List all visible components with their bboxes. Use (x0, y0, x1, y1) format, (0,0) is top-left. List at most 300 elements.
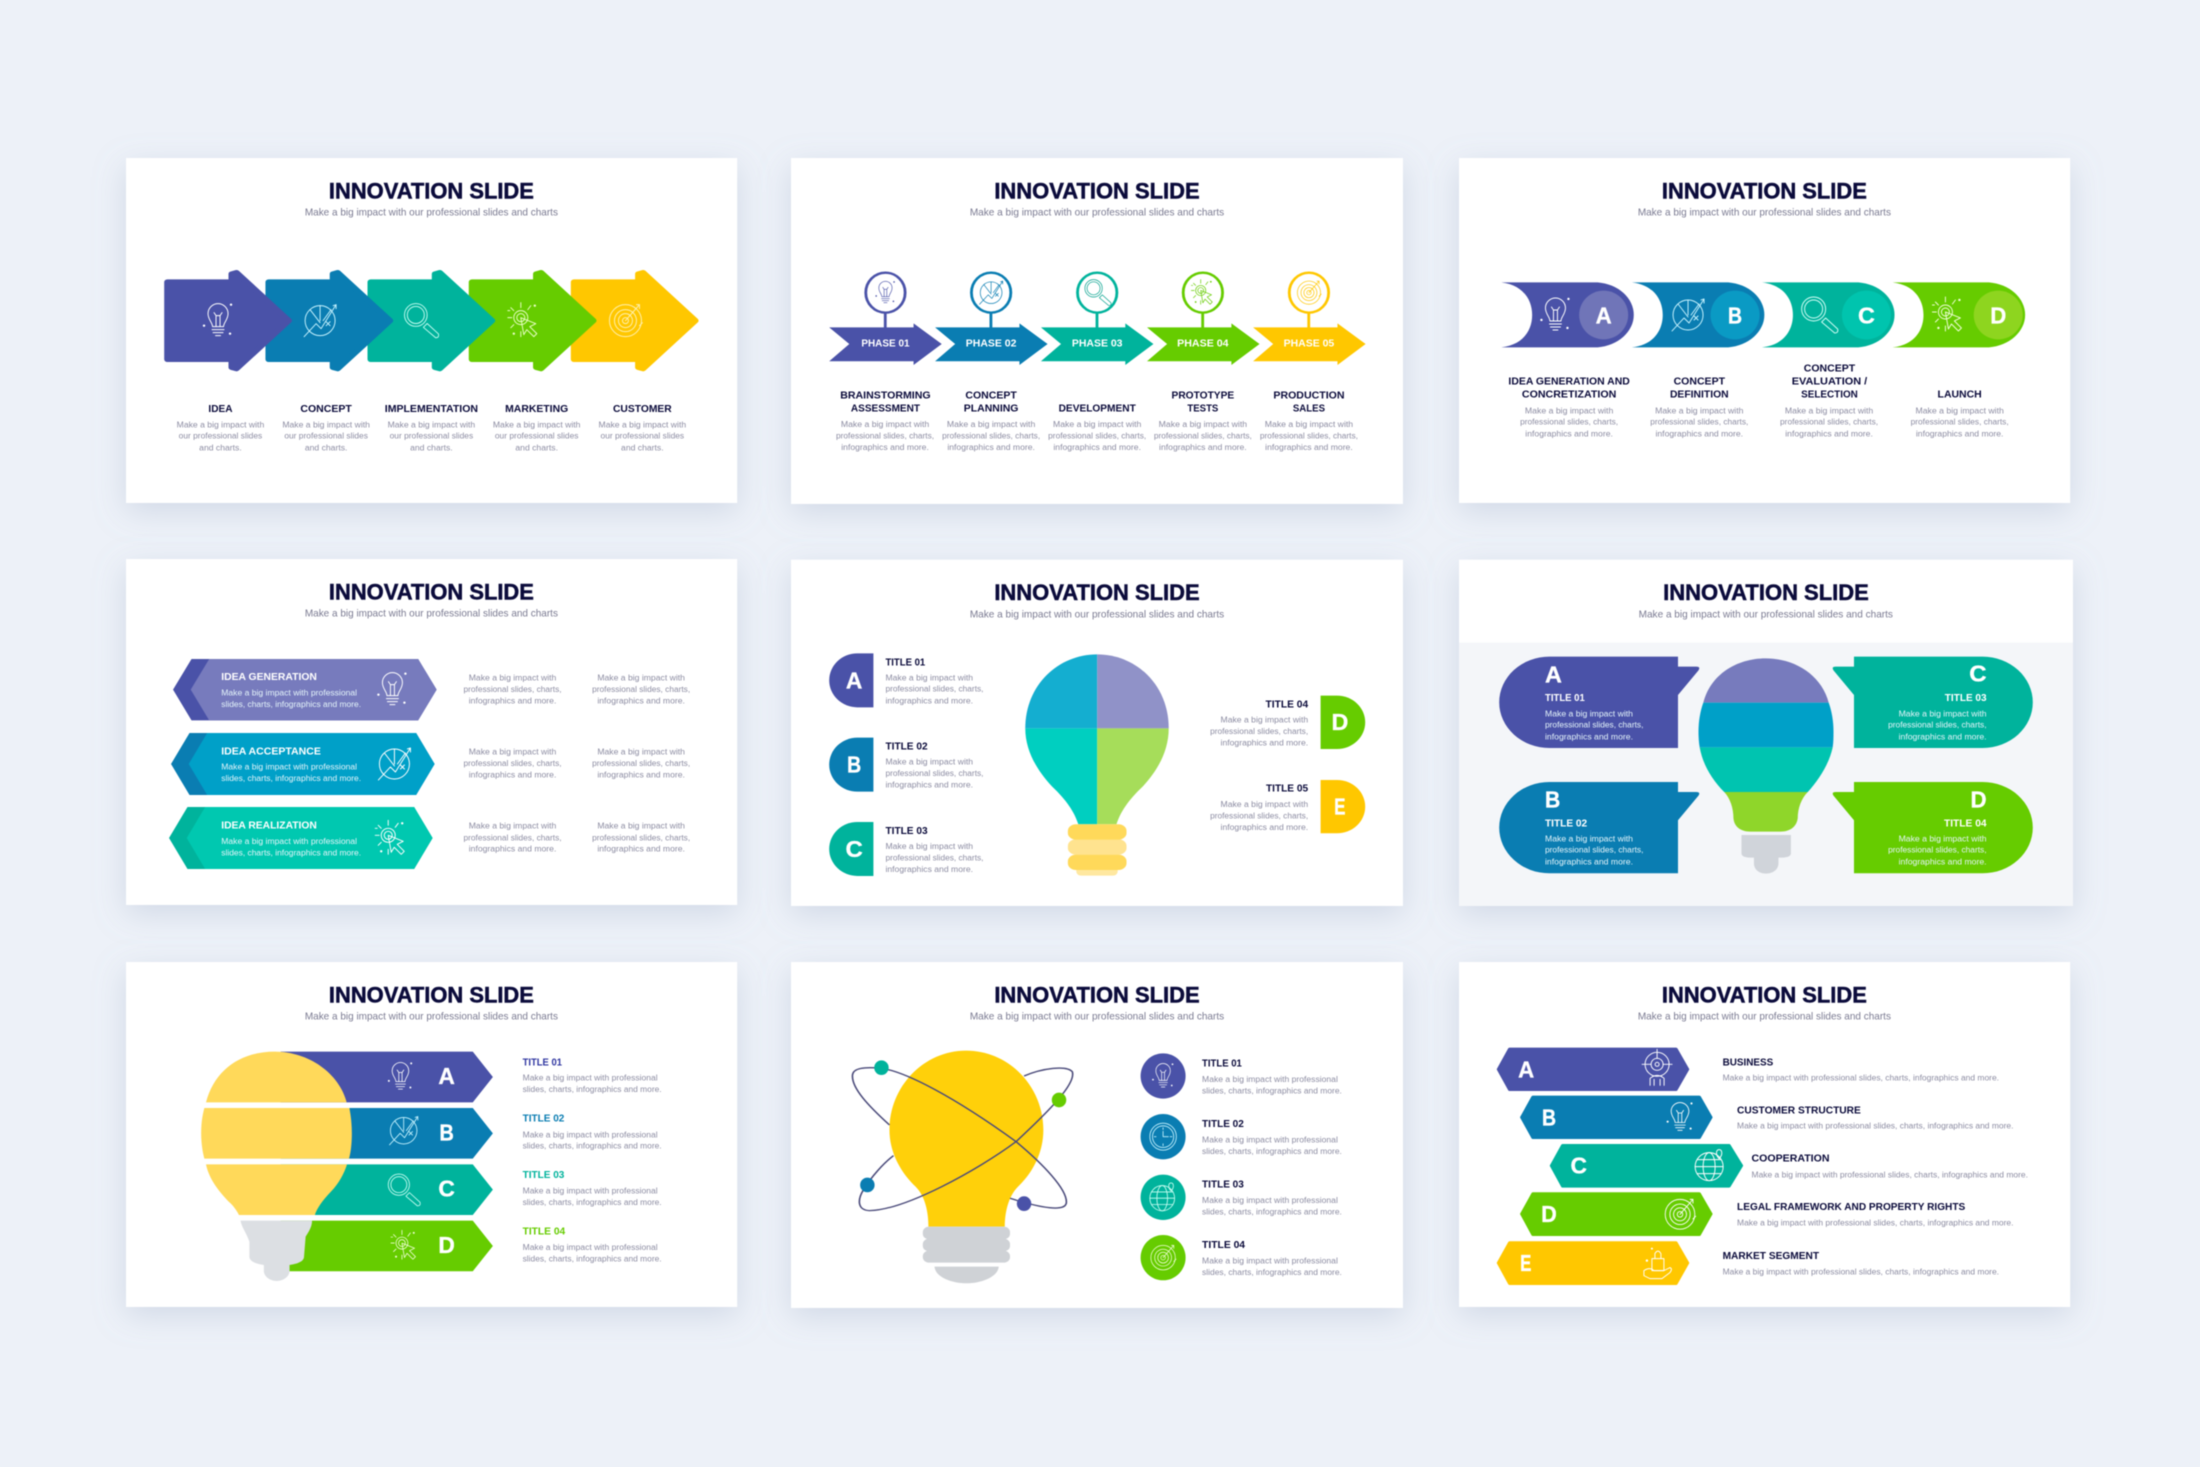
text: brainstorming (836, 391, 934, 452)
text: marketing: MARKETING (505, 404, 568, 415)
text: concept planning: professional slides, charts, (942, 431, 1040, 440)
panel: slide 4 hexagon banners (126, 559, 737, 905)
text: brainstorming: professional slides, charts, (836, 431, 934, 440)
slide card (1459, 158, 2070, 503)
text: prototype tests: TESTS (1187, 403, 1219, 414)
text: idea generation: professional slides, charts, (1520, 417, 1618, 426)
item B (829, 738, 983, 792)
text: row 2 descriptions (464, 747, 690, 779)
item E: Make a big impact with (1221, 800, 1308, 809)
arrow: marketing (472, 273, 593, 369)
item D: Make a big impact with (1221, 715, 1308, 724)
icon: pie (390, 1117, 418, 1145)
bar E: market segment: MARKET SEGMENT (1723, 1251, 1819, 1262)
text: development: DEVELOPMENT (1059, 403, 1136, 414)
list item 2 (1141, 1114, 1342, 1159)
item B: professional slides, charts, (885, 769, 983, 778)
text: brainstorming: ASSESSMENT (851, 403, 920, 414)
text: launch: infographics and more. (1916, 429, 2003, 438)
bar C: cooperation (1551, 1145, 2028, 1186)
list item 3: slides, charts, infographics and more. (1202, 1207, 1342, 1216)
arrow: phase 04: PHASE 04 (1177, 339, 1229, 349)
panel: slide 9 staggered hexagons (1459, 962, 2070, 1307)
text: title 04: slides, charts, infographics and more. (523, 1254, 662, 1263)
text: development: professional slides, charts, (1048, 431, 1146, 440)
bar B: customer structure (1522, 1097, 2014, 1138)
pill D: D (1990, 303, 2006, 329)
text: idea: our professional slides (179, 431, 263, 440)
text: marketing: and charts. (515, 443, 558, 452)
text: row 1 descriptions: professional slides, charts, (592, 685, 690, 694)
callout B: TITLE 02 (1545, 818, 1587, 829)
text: prototype tests (1154, 391, 1252, 452)
text: customer: and charts. (621, 443, 664, 452)
phase 3 marker (1078, 273, 1117, 328)
text: row 1 descriptions (464, 673, 690, 705)
text: row 1 descriptions: Make a big impact with (469, 673, 556, 682)
text: row 3 descriptions: infographics and more. (469, 844, 556, 853)
callout B: B (1545, 787, 1560, 813)
text: implementation: our professional slides (390, 431, 474, 440)
pill D (1893, 282, 2025, 347)
banner: idea generation (173, 659, 437, 720)
slide card (126, 962, 737, 1307)
text: concept: CONCEPT (300, 404, 352, 415)
pill C: C (1858, 303, 1875, 329)
text: implementation: and charts. (410, 443, 453, 452)
callout A: professional slides, charts, (1545, 720, 1643, 729)
text: production sales: infographics and more. (1265, 443, 1353, 452)
item C: professional slides, charts, (885, 853, 983, 862)
arrow: concept (269, 273, 390, 369)
item E: professional slides, charts, (1210, 811, 1308, 820)
panel: slide 8 atom bulb (791, 962, 1403, 1308)
banner: idea acceptance (171, 733, 435, 795)
text: title 01: slides, charts, infographics and more. (523, 1085, 662, 1094)
text: development: infographics and more. (1053, 443, 1141, 452)
callout B (1499, 782, 1699, 873)
list item 4: TITLE 04 (1202, 1240, 1246, 1251)
text: row 2 descriptions: infographics and more. (469, 770, 556, 779)
subheading: Make a big impact with our professional slides and charts (970, 1011, 1224, 1022)
callout A: Make a big impact with (1545, 709, 1633, 718)
text: implementation (385, 404, 478, 452)
text: concept planning: Make a big impact with (947, 420, 1035, 429)
list item 2: TITLE 02 (1202, 1119, 1244, 1130)
text: title 03: slides, charts, infographics and more. (523, 1198, 662, 1207)
subheading: Make a big impact with our professional slides and charts (970, 609, 1224, 620)
list item 1 (1141, 1053, 1342, 1099)
split yellow bulb (201, 1052, 352, 1281)
subheading: Make a big impact with our professional slides and charts (305, 207, 558, 218)
text: row 1 descriptions: Make a big impact with (597, 673, 685, 682)
text: concept evaluation: SELECTION (1801, 390, 1858, 400)
banner: idea acceptance: IDEA ACCEPTANCE (221, 746, 321, 757)
letter B: B (439, 1120, 454, 1146)
text: title 01: TITLE 01 (523, 1057, 563, 1068)
text: title 02: slides, charts, infographics and more. (523, 1141, 662, 1150)
text: title 01: Make a big impact with professional (523, 1073, 658, 1082)
text: implementation: IMPLEMENTATION (385, 404, 478, 415)
arrow: phase 02 (935, 323, 1048, 365)
subheading: Make a big impact with our professional slides and charts (1639, 609, 1893, 620)
text: prototype tests: Make a big impact with (1159, 420, 1247, 429)
text: row 3 descriptions: Make a big impact with (469, 821, 556, 830)
text: customer: CUSTOMER (613, 404, 672, 415)
text: concept evaluation: CONCEPT (1804, 364, 1855, 374)
callout C: professional slides, charts, (1888, 720, 1987, 729)
text: development (1048, 403, 1146, 452)
ribbon D (281, 1221, 493, 1271)
arrow: phase 05 (1253, 323, 1366, 365)
text: title 04 (523, 1226, 662, 1263)
text: concept planning: CONCEPT (965, 391, 1017, 401)
pill C (1762, 282, 1895, 347)
item D: infographics and more. (1221, 738, 1308, 747)
ribbon C (281, 1164, 493, 1215)
item C: C (845, 837, 863, 862)
item B: infographics and more. (885, 780, 973, 789)
text: launch: LAUNCH (1938, 390, 1982, 400)
yellow bulb (889, 1051, 1043, 1283)
callout D: Make a big impact with (1899, 834, 1987, 843)
banner: idea generation: slides, charts, infographics and more. (221, 700, 361, 709)
text: concept evaluation: EVALUATION / (1792, 377, 1868, 387)
subheading: Make a big impact with our professional slides and charts (305, 1011, 558, 1022)
callout A (1499, 657, 1699, 748)
text: idea: and charts. (199, 443, 242, 452)
subheading: Make a big impact with our professional slides and charts (1638, 207, 1891, 218)
list item 3: Make a big impact with professional (1202, 1196, 1338, 1205)
callout A: infographics and more. (1545, 732, 1633, 741)
orbits and planets (852, 1060, 1073, 1211)
text: concept definition (1650, 377, 1748, 438)
list item 4: Make a big impact with professional (1202, 1256, 1338, 1265)
callout B: professional slides, charts, (1545, 845, 1643, 854)
item E (1210, 780, 1365, 833)
panel: slide 6 callouts and striped bulb (1459, 560, 2073, 906)
text: title 03: Make a big impact with professional (523, 1186, 658, 1195)
text: idea generation: infographics and more. (1525, 429, 1613, 438)
text: launch (1911, 390, 2009, 438)
arrow: phase 01: PHASE 01 (861, 339, 910, 349)
slide card (791, 560, 1403, 906)
lower tinted band (1459, 643, 2073, 906)
item A: A (846, 668, 862, 694)
text: row 1 descriptions: professional slides, charts, (464, 685, 562, 694)
list item 1: Make a big impact with professional (1202, 1075, 1338, 1084)
text: concept planning: PLANNING (964, 403, 1019, 414)
heading: INNOVATION SLIDE (1662, 983, 1867, 1008)
text: row 2 descriptions: Make a big impact with (597, 747, 685, 756)
text: row 3 descriptions: professional slides, charts, (592, 833, 690, 842)
panel: slide 1 arrows (126, 158, 737, 503)
arrow: phase 01 (829, 323, 942, 365)
text: title 02 (523, 1114, 662, 1150)
text: row 3 descriptions (464, 821, 690, 853)
item C: TITLE 03 (885, 826, 928, 837)
banner: idea acceptance: slides, charts, infographics and more. (221, 774, 361, 783)
text: production sales: SALES (1293, 403, 1325, 414)
text: production sales (1260, 391, 1358, 452)
item C: Make a big impact with (885, 842, 973, 851)
text: title 04: TITLE 04 (523, 1226, 566, 1237)
text: implementation: Make a big impact with (388, 420, 475, 429)
banner: idea realization (169, 807, 433, 869)
text: concept evaluation: professional slides, charts, (1780, 417, 1878, 426)
callout C: infographics and more. (1899, 732, 1987, 741)
bar C: cooperation: Make a big impact with professional slides, charts, infographics and more. (1752, 1170, 2028, 1179)
banner: idea generation: Make a big impact with professional (221, 688, 357, 697)
bar A: business: A (1518, 1057, 1534, 1083)
text: row 2 descriptions: Make a big impact with (469, 747, 556, 756)
text: concept definition: DEFINITION (1670, 390, 1729, 400)
text: concept (282, 404, 370, 452)
banner: idea realization: IDEA REALIZATION (221, 821, 317, 831)
text: title 04: Make a big impact with professional (523, 1243, 658, 1252)
icon: click (391, 1230, 415, 1259)
text: launch: professional slides, charts, (1911, 417, 2009, 426)
item C (829, 822, 983, 876)
callout A: TITLE 01 (1545, 693, 1585, 704)
text: title 01 (523, 1057, 662, 1094)
text: row 2 descriptions: infographics and more. (597, 770, 685, 779)
text: production sales: Make a big impact with (1265, 420, 1353, 429)
icon: bulb (388, 1062, 412, 1089)
text: row 3 descriptions: infographics and more. (597, 844, 685, 853)
banner: idea generation: IDEA GENERATION (221, 672, 317, 683)
subheading: Make a big impact with our professional slides and charts (970, 207, 1224, 218)
item A: infographics and more. (885, 696, 973, 705)
text: concept evaluation (1780, 364, 1878, 438)
callout C: Make a big impact with (1899, 709, 1987, 718)
heading: INNOVATION SLIDE (1662, 179, 1867, 204)
heading: INNOVATION SLIDE (1663, 581, 1869, 605)
slide card (1459, 560, 2073, 906)
ribbon A (281, 1052, 493, 1102)
quadrant light bulb (1025, 654, 1169, 876)
arrow: phase 03 (1041, 323, 1153, 365)
icon: bulb (203, 303, 232, 336)
text: title 03 (523, 1170, 662, 1207)
arrow: customer (574, 273, 695, 369)
pill A: A (1596, 303, 1612, 329)
callout C (1833, 657, 2033, 748)
arrow: phase 05: PHASE 05 (1284, 339, 1335, 349)
text: idea generation: CONCRETIZATION (1522, 390, 1616, 400)
phase 5 marker (1289, 273, 1329, 328)
phase 1 marker (866, 273, 905, 328)
list item 4 (1141, 1235, 1342, 1280)
item B: TITLE 02 (885, 742, 928, 752)
text: marketing (493, 404, 580, 452)
text: marketing: Make a big impact with (493, 420, 580, 429)
bar B: customer structure: B (1542, 1105, 1556, 1131)
callout C: C (1969, 662, 1987, 687)
callout B: Make a big impact with (1545, 834, 1633, 843)
icon: target (609, 305, 642, 337)
bar E: market segment: Make a big impact with professional slides, charts, infographics and more. (1723, 1267, 1999, 1276)
letter A: A (438, 1064, 455, 1089)
heading: INNOVATION SLIDE (329, 983, 534, 1008)
banner: idea realization: slides, charts, infographics and more. (221, 848, 361, 857)
text: idea: IDEA (208, 404, 233, 415)
callout A: A (1545, 662, 1562, 688)
item D: TITLE 04 (1266, 699, 1309, 710)
slide card (126, 559, 737, 905)
bar A: business: Make a big impact with professional slides, charts, infographics and more. (1723, 1073, 1999, 1082)
text: idea (177, 404, 264, 452)
bar D: legal framework: D (1541, 1202, 1557, 1227)
icon: click (508, 303, 537, 337)
text: production sales: PRODUCTION (1273, 391, 1345, 401)
arrow: phase 02: PHASE 02 (966, 339, 1016, 349)
list item 3: TITLE 03 (1202, 1179, 1244, 1190)
arrow: phase 03: PHASE 03 (1072, 339, 1123, 349)
heading: INNOVATION SLIDE (994, 983, 1200, 1008)
text: production sales: professional slides, charts, (1260, 431, 1358, 440)
text: concept definition: CONCEPT (1674, 377, 1725, 387)
list item 4: slides, charts, infographics and more. (1202, 1268, 1342, 1277)
phase 4 marker (1183, 273, 1223, 328)
text: idea generation (1508, 377, 1630, 438)
text: launch: Make a big impact with (1915, 406, 2004, 415)
callout D: D (1971, 787, 1987, 813)
arrow: phase 04 (1147, 323, 1260, 365)
text: concept evaluation: infographics and more. (1785, 429, 1873, 438)
text: row 2 descriptions: professional slides, charts, (592, 759, 690, 768)
list item 1: slides, charts, infographics and more. (1202, 1086, 1342, 1095)
ribbon B (281, 1108, 493, 1159)
text: idea: Make a big impact with (177, 420, 264, 429)
bar A: business (1498, 1049, 1999, 1090)
icon: pie (304, 305, 336, 337)
text: row 3 descriptions: professional slides, charts, (464, 833, 562, 842)
text: row 1 descriptions: infographics and more. (597, 696, 685, 705)
arrow: idea (167, 273, 289, 369)
callout C: TITLE 03 (1945, 693, 1987, 704)
text: prototype tests: infographics and more. (1159, 443, 1247, 452)
text: row 3 descriptions: Make a big impact with (597, 821, 685, 830)
bar D: legal framework: LEGAL FRAMEWORK AND PROPERTY RIGHTS (1737, 1202, 1966, 1213)
text: customer: our professional slides (601, 431, 684, 440)
item E: TITLE 05 (1266, 784, 1309, 794)
text: customer: Make a big impact with (599, 420, 686, 429)
text: concept definition: infographics and more. (1655, 429, 1743, 438)
arrow: implementation (371, 273, 492, 369)
heading: INNOVATION SLIDE (994, 581, 1200, 605)
text: concept: and charts. (305, 443, 347, 452)
item A: professional slides, charts, (885, 684, 983, 693)
item E: E (1334, 794, 1346, 820)
text: concept planning (942, 391, 1040, 452)
text: concept evaluation: Make a big impact with (1785, 406, 1873, 415)
text: concept planning: infographics and more. (947, 443, 1035, 452)
slide card (791, 158, 1403, 504)
callout D: professional slides, charts, (1888, 845, 1987, 854)
item D: D (1331, 710, 1348, 735)
banner: idea acceptance: Make a big impact with professional (221, 762, 357, 771)
callout D: TITLE 04 (1944, 818, 1987, 829)
text: idea generation: IDEA GENERATION AND (1508, 377, 1630, 387)
bar B: customer structure: Make a big impact with professional slides, charts, infographics and more. (1737, 1121, 2014, 1130)
subheading: Make a big impact with our professional slides and charts (305, 608, 558, 619)
letter D: D (438, 1233, 455, 1258)
text: prototype tests: PROTOTYPE (1172, 391, 1235, 401)
text: brainstorming: Make a big impact with (841, 420, 929, 429)
list item 2: slides, charts, infographics and more. (1202, 1147, 1342, 1156)
text: concept: Make a big impact with (282, 420, 370, 429)
text: row 1 descriptions: infographics and more. (469, 696, 556, 705)
item A: TITLE 01 (885, 657, 926, 668)
item B: B (847, 753, 861, 778)
pill B: B (1728, 303, 1742, 329)
striped light bulb (1698, 658, 1833, 874)
icon: magnifier (388, 1174, 420, 1206)
bar E: market segment (1498, 1243, 1999, 1284)
item B: Make a big impact with (885, 757, 973, 766)
callout D (1833, 782, 2033, 873)
callout D: infographics and more. (1899, 857, 1987, 866)
slide card (1459, 962, 2070, 1307)
text: concept: our professional slides (284, 431, 368, 440)
panel: slide 2 phases (791, 158, 1403, 504)
heading: INNOVATION SLIDE (994, 179, 1200, 204)
pill B (1632, 282, 1764, 347)
phase 2 marker (971, 273, 1011, 328)
icon: magnifier (404, 304, 439, 338)
heading: INNOVATION SLIDE (329, 580, 534, 605)
item A (829, 653, 983, 707)
item A: Make a big impact with (885, 673, 973, 682)
item E: infographics and more. (1221, 823, 1308, 832)
bar D: legal framework: Make a big impact with professional slides, charts, infographics and more. (1737, 1218, 2014, 1227)
item C: infographics and more. (885, 865, 973, 874)
panel: slide 5 quadrant bulb (791, 560, 1403, 906)
item D (1210, 696, 1365, 749)
text: concept definition: Make a big impact with (1655, 406, 1743, 415)
slide card (791, 962, 1403, 1308)
text: title 02: Make a big impact with professional (523, 1130, 658, 1139)
bar E: market segment: E (1520, 1251, 1531, 1276)
list item 3 (1141, 1175, 1342, 1220)
bar C: cooperation: COOPERATION (1752, 1154, 1829, 1164)
text: customer (599, 404, 686, 452)
bar A: business: BUSINESS (1723, 1057, 1774, 1068)
item D: professional slides, charts, (1210, 727, 1308, 736)
text: idea generation: Make a big impact with (1525, 406, 1613, 415)
text: brainstorming: BRAINSTORMING (840, 391, 931, 401)
bar C: cooperation: C (1571, 1153, 1587, 1179)
subheading: Make a big impact with our professional slides and charts (1638, 1011, 1891, 1022)
text: prototype tests: professional slides, charts, (1154, 431, 1252, 440)
text: marketing: our professional slides (495, 431, 579, 440)
text: concept definition: professional slides, charts, (1650, 417, 1748, 426)
letter C: C (438, 1177, 455, 1202)
callout B: infographics and more. (1545, 857, 1633, 866)
text: row 2 descriptions: professional slides, charts, (464, 759, 562, 768)
pill A (1501, 282, 1634, 347)
text: brainstorming: infographics and more. (841, 443, 929, 452)
panel: slide 7 bulb ribbons (126, 962, 737, 1307)
panel: slide 3 pills (1459, 158, 2070, 503)
list item 2: Make a big impact with professional (1202, 1135, 1338, 1144)
slide card (126, 158, 737, 503)
heading: INNOVATION SLIDE (329, 179, 534, 204)
text: title 03: TITLE 03 (523, 1170, 564, 1181)
bar B: customer structure: CUSTOMER STRUCTURE (1737, 1105, 1861, 1116)
text: development: Make a big impact with (1053, 420, 1141, 429)
